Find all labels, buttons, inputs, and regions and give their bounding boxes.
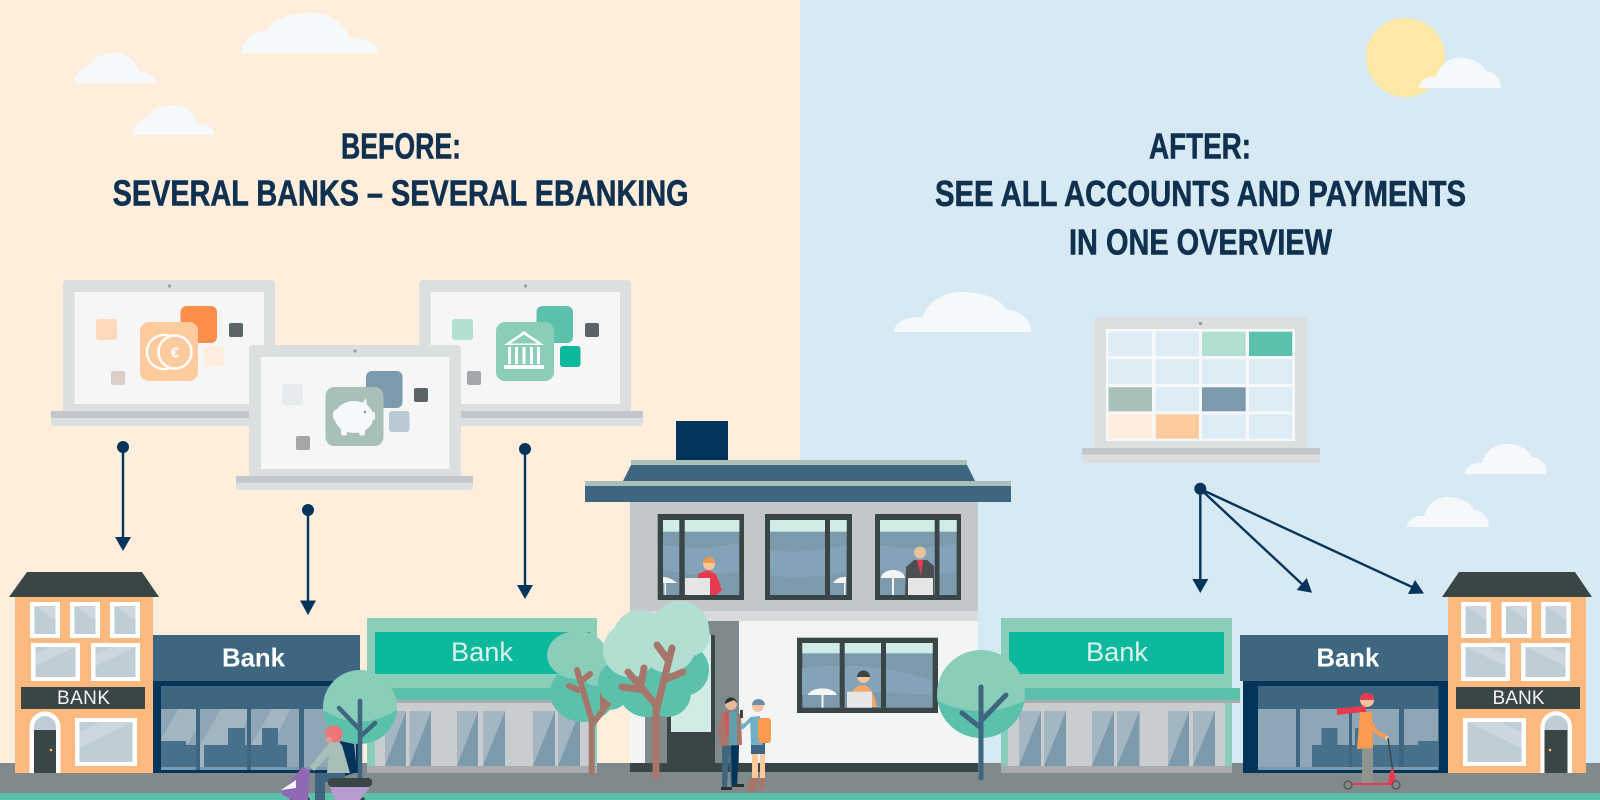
building: navy bank right	[1240, 635, 1448, 773]
people: couple talking	[718, 697, 771, 792]
title: before: SEVERAL BANKS – SEVERAL EBANKING	[113, 172, 689, 214]
sign: Bank: Bank	[451, 637, 513, 667]
sign: Bank: Bank	[1086, 637, 1148, 667]
building: teal bank right	[1001, 618, 1240, 773]
title: after: IN ONE OVERVIEW	[1069, 222, 1332, 262]
building: orange bank left	[9, 572, 159, 773]
icon: bank building	[504, 331, 544, 369]
laptop: coins ebanking	[51, 280, 287, 426]
icon: coins: €	[171, 344, 180, 362]
arrow: bank laptop to teal bank	[517, 443, 533, 599]
background: after side	[800, 0, 1600, 800]
tree: round left	[320, 670, 400, 777]
title: after: AFTER:	[1149, 126, 1251, 166]
sign: BANK banner: BANK	[57, 688, 110, 709]
tree: large centre	[598, 601, 710, 776]
man with phone	[718, 697, 744, 790]
building: navy bank left	[153, 635, 360, 773]
cloud: by the sun	[1419, 58, 1501, 88]
sign: BANK banner	[1456, 687, 1580, 709]
cloud: after large	[894, 292, 1031, 332]
building: orange bank right	[1442, 572, 1592, 773]
woman with backpack	[740, 699, 771, 792]
tree: round right	[936, 650, 1026, 778]
title: after: SEE ALL ACCOUNTS AND PAYMENTS	[935, 173, 1466, 214]
window: first floor right with businessman	[875, 514, 961, 600]
cloud: before top centre	[242, 13, 378, 53]
title: after	[935, 126, 1466, 262]
background: before side	[0, 0, 800, 800]
cloud: after right upper	[1465, 444, 1547, 474]
icon: sun	[1366, 18, 1445, 97]
building: teal bank left	[367, 618, 597, 773]
table of accounts	[1108, 332, 1292, 439]
arrows: overview laptop to all three banks	[1192, 483, 1424, 594]
sign: Bank: Bank	[222, 643, 286, 673]
window: first floor centre	[765, 514, 852, 600]
cloud: after right lower	[1407, 497, 1489, 527]
window: ground floor with person	[797, 638, 938, 713]
sign: BANK banner: BANK	[1492, 688, 1545, 709]
chimney block	[676, 421, 728, 460]
tree: small centre	[547, 631, 630, 772]
laptop: single overview	[1082, 317, 1320, 463]
entrance door	[645, 621, 739, 763]
ground: pavement	[0, 763, 1600, 793]
title: before	[113, 126, 689, 214]
arrow: coins laptop to orange bank	[115, 441, 131, 551]
cloud: before top left	[74, 53, 156, 83]
building: central office	[585, 421, 1011, 772]
window: first floor left with person	[658, 514, 744, 600]
arrow: savings laptop to navy bank	[300, 504, 316, 615]
person: kick scooter rider	[1337, 693, 1400, 789]
title: before: BEFORE:	[341, 126, 461, 166]
icon: coins	[147, 335, 192, 369]
ground: teal strip	[0, 793, 1600, 800]
laptop: bank ebanking	[407, 280, 643, 426]
sign: BANK banner	[21, 687, 145, 709]
sign: Bank: Bank	[1316, 643, 1380, 673]
cloud: before lower	[132, 105, 214, 135]
person: scooter rider	[281, 726, 372, 800]
icon: piggy bank	[334, 398, 375, 436]
laptop: savings ebanking	[236, 345, 473, 490]
